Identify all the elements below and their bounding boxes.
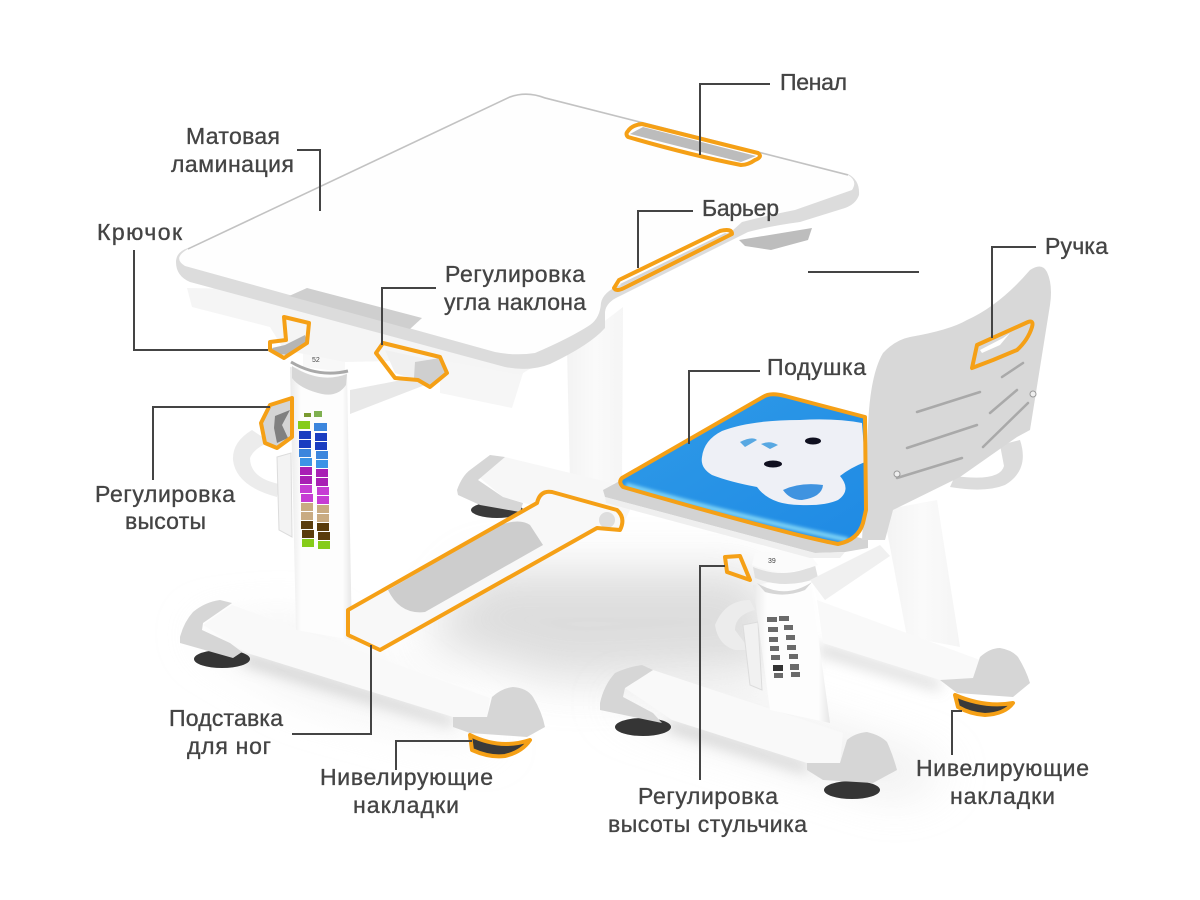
label: Пенал: Пенал (780, 69, 847, 95)
leader lines (134, 84, 1036, 780)
footrest (348, 492, 622, 650)
height scale colour bands (298, 411, 330, 549)
label: Регулировка высоты стульчика: Регулировка (638, 783, 778, 809)
label: Нивелирующие накладки (left): Нивелирующие (320, 764, 493, 790)
label: Регулировка угла наклона: Регулировка (445, 261, 585, 287)
label: Нивелирующие накладки (right) (916, 755, 1089, 809)
cushion with monkey face (620, 394, 866, 565)
size mark on column: 52 (312, 357, 320, 364)
label: Регулировка высоты стульчика (608, 783, 807, 837)
callout outlines: orange highlights (261, 124, 1032, 756)
label: Крючок: Крючок (97, 219, 183, 245)
label: Подставка для ног: для ног (187, 733, 271, 759)
label: Регулировка высоты: высоты (125, 508, 206, 534)
label: Регулировка высоты: Регулировка (95, 481, 235, 507)
label: Нивелирующие накладки (right): накладки (950, 783, 1055, 809)
label: Ручка: Ручка (1045, 233, 1108, 259)
chair height scale (767, 616, 800, 678)
label: Регулировка высоты стульчика: высоты стульчика (608, 811, 807, 837)
label: Регулировка высоты (95, 481, 235, 534)
label: Подставка для ног: Подставка (169, 705, 283, 731)
label: Нивелирующие накладки (left) (320, 764, 493, 818)
floor shadows (190, 570, 950, 795)
label: Регулировка угла наклона: угла наклона (444, 289, 586, 315)
label: Матовая ламинация: Матовая (186, 123, 280, 149)
label: Нивелирующие накладки (right): Нивелирующие (916, 755, 1089, 781)
label: Подставка для ног (169, 705, 283, 759)
chair: frame and base (600, 440, 1030, 799)
desk: rear base and right column (440, 307, 640, 530)
label: Регулировка угла наклона (444, 261, 586, 315)
size mark on chair column: 39 (768, 558, 776, 565)
label: Подушка: Подушка (767, 354, 866, 380)
label: Матовая ламинация (171, 123, 294, 177)
label: Барьер: Барьер (702, 195, 779, 221)
label: Матовая ламинация: ламинация (171, 151, 294, 177)
label: Нивелирующие накладки (left): накладки (353, 792, 459, 818)
chair back (862, 266, 1051, 540)
desk: left frame and foot bar (180, 323, 545, 737)
chair seat (603, 477, 868, 558)
desk top (176, 93, 859, 447)
